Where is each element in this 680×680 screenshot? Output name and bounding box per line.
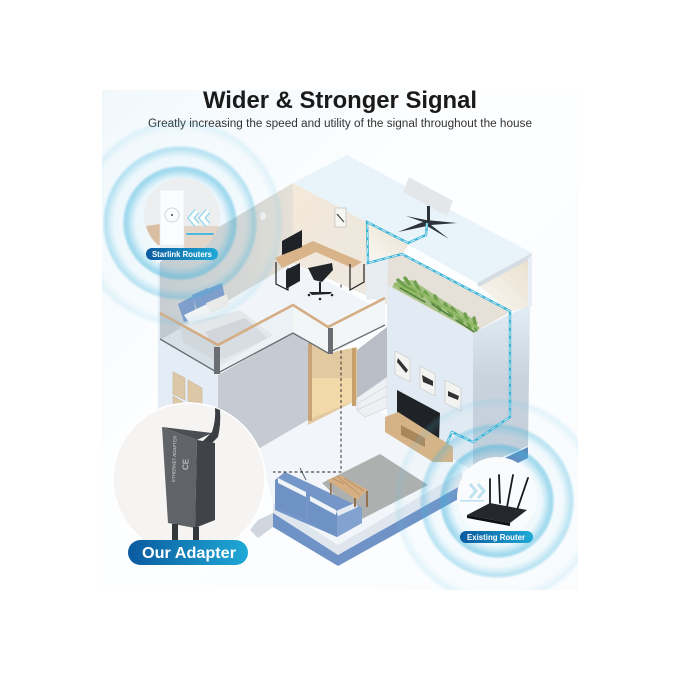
TV wall block	[385, 285, 530, 470]
TV	[397, 390, 440, 440]
label: Starlink Routers	[152, 250, 213, 259]
back wall	[293, 183, 388, 305]
upper floor	[160, 183, 388, 373]
background panel	[102, 90, 578, 590]
signal rings: existing router	[394, 399, 578, 590]
adapter device	[162, 408, 220, 542]
sofa	[275, 468, 362, 537]
coffee table	[327, 475, 368, 507]
label: Existing Router	[467, 533, 525, 542]
router photo	[144, 178, 220, 254]
lower grey wall	[218, 333, 308, 448]
wall art upper	[335, 208, 346, 227]
desk	[275, 230, 364, 290]
signal cable	[367, 222, 510, 443]
desktop tower	[286, 263, 300, 289]
window	[173, 372, 202, 408]
label	[460, 531, 533, 543]
title: Wider & Stronger Signal	[203, 87, 477, 114]
dashed cable drop	[273, 238, 366, 472]
subtitle: Greatly increasing the speed and utility of the signal throughout the house	[148, 118, 532, 130]
signal rings: Starlink router	[102, 120, 282, 325]
office chair	[308, 263, 333, 300]
label	[128, 540, 248, 565]
adapter device: CE	[181, 459, 190, 470]
house illustration	[158, 155, 532, 566]
Starlink dish and mount	[398, 177, 457, 239]
rug	[322, 454, 428, 520]
router photo	[457, 457, 537, 537]
glass balustrade	[160, 298, 385, 374]
wall light	[260, 212, 266, 220]
label: Our Adapter	[142, 545, 236, 562]
roof assembly	[293, 155, 532, 333]
ground slab	[250, 400, 528, 566]
left wall	[160, 183, 293, 340]
adapter device: ETHERNET ADAPTER	[171, 435, 178, 482]
arrows	[191, 211, 208, 225]
wall art	[395, 351, 461, 411]
corridor and stairs	[308, 327, 387, 425]
lower left wall with windows	[158, 262, 218, 445]
label	[146, 248, 218, 260]
plants	[392, 278, 478, 332]
bed	[178, 283, 273, 365]
TV stand	[385, 412, 453, 462]
monitor	[282, 230, 302, 255]
adapter callout	[113, 403, 265, 565]
